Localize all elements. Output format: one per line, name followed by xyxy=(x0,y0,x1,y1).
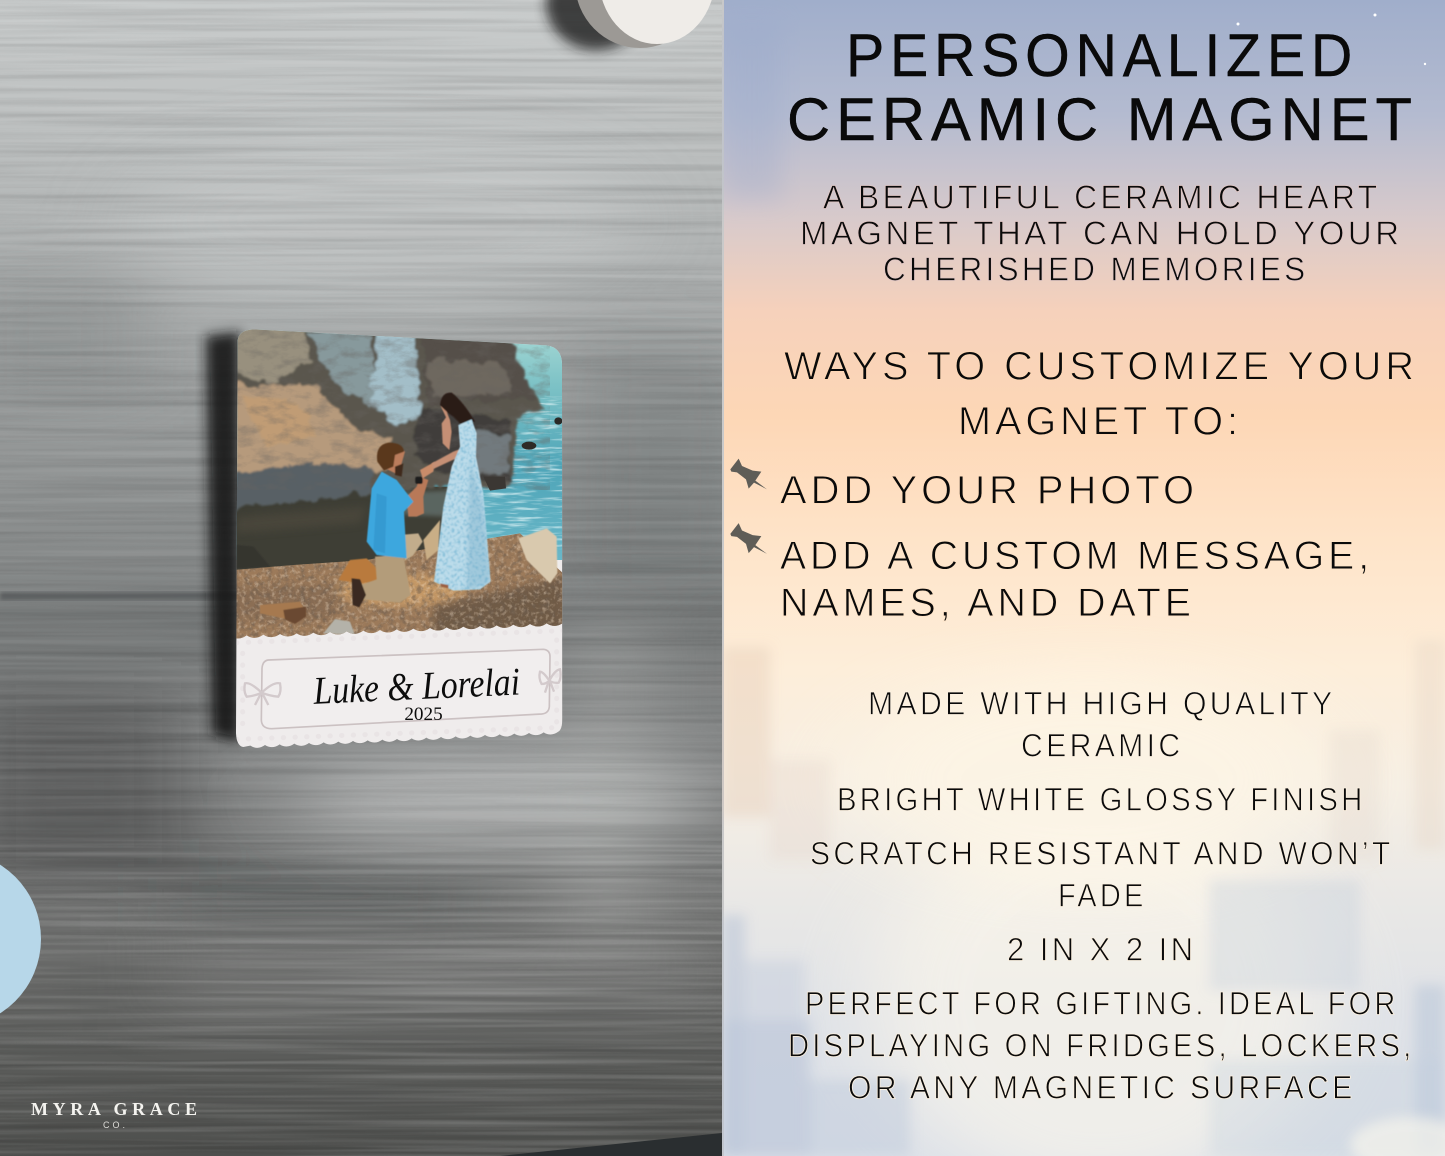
feature: high quality ceramic: MADE WITH HIGH QUALITY xyxy=(868,686,1336,722)
feature: scratch resistant: FADE xyxy=(1058,878,1146,914)
lace scallop trim xyxy=(237,631,563,739)
woman in blue dress xyxy=(432,393,493,593)
icon: left bow xyxy=(244,683,281,705)
feature: gifting: PERFECT FOR GIFTING. IDEAL FOR xyxy=(805,986,1398,1022)
heading: ways to customize xyxy=(784,344,1418,444)
feature list xyxy=(788,686,1414,1106)
title xyxy=(787,22,1418,153)
far leg xyxy=(404,532,423,560)
man kneeling xyxy=(352,443,435,607)
subtitle: A BEAUTIFUL CERAMIC HEART xyxy=(823,178,1380,216)
list item: add a custom message xyxy=(780,534,1373,625)
heading: ways to customize: MAGNET TO: xyxy=(958,400,1242,444)
sea stones xyxy=(554,417,562,425)
dress xyxy=(434,419,491,591)
outstretched arm xyxy=(431,449,460,470)
name plate xyxy=(244,649,561,729)
feature: scratch resistant xyxy=(810,836,1394,914)
subtitle xyxy=(800,178,1402,288)
hands xyxy=(420,462,435,478)
subtitle: CHERISHED MEMORIES xyxy=(883,250,1308,288)
dark cove water xyxy=(233,487,460,570)
title: CERAMIC MAGNET xyxy=(787,86,1418,153)
feature: gifting xyxy=(788,986,1414,1106)
thigh and calf xyxy=(357,555,411,603)
panel: watercolor sky and city background xyxy=(722,0,1445,1156)
panel: brushed steel fridge background xyxy=(0,0,760,1156)
photo of proposal on the shore xyxy=(236,330,562,638)
feature: glossy finish: BRIGHT WHITE GLOSSY FINISH xyxy=(837,782,1366,818)
icon: round blue fridge magnet at left xyxy=(0,851,41,1027)
icon: push pin 2 xyxy=(730,523,767,554)
feet xyxy=(440,583,448,588)
icon: right bow xyxy=(539,669,561,693)
title: PERSONALIZED xyxy=(846,22,1358,89)
neck and head xyxy=(387,450,406,474)
list item: add a custom message: ADD A CUSTOM MESSAGE, xyxy=(780,534,1373,578)
icon: round white fridge magnet at top xyxy=(546,0,715,50)
rock cliff xyxy=(220,320,550,512)
icon: push pin 1 xyxy=(730,459,767,489)
brand logo: CO. xyxy=(103,1120,125,1130)
boot xyxy=(352,578,366,607)
year: 2025 xyxy=(404,704,443,725)
feature: size: 2 IN X 2 IN xyxy=(1007,932,1196,968)
hair xyxy=(440,393,475,425)
feature: gifting: OR ANY MAGNETIC SURFACE xyxy=(848,1070,1356,1106)
magnet shadow xyxy=(206,332,240,742)
feature: high quality ceramic: CERAMIC xyxy=(1021,728,1184,764)
feature: high quality ceramic xyxy=(868,686,1336,764)
stones on ground xyxy=(260,520,557,635)
list item: add your photo: ADD YOUR PHOTO xyxy=(780,468,1198,512)
brand logo xyxy=(31,1099,197,1130)
pebble ground xyxy=(233,533,567,647)
subtitle: MAGNET THAT CAN HOLD YOUR xyxy=(800,214,1402,252)
names: Luke & Lorelai xyxy=(312,660,521,713)
shirt xyxy=(367,472,413,558)
magnet base card xyxy=(220,320,567,753)
brand logo: MYRA GRACE xyxy=(31,1099,197,1119)
watch xyxy=(415,477,423,484)
heading: ways to customize: WAYS TO CUSTOMIZE YOUR xyxy=(784,344,1418,388)
list item: add a custom message: NAMES, AND DATE xyxy=(780,581,1195,625)
feature: scratch resistant: SCRATCH RESISTANT AND WON’T xyxy=(810,836,1394,872)
orange rock behind man xyxy=(338,558,377,584)
ceramic photo magnet xyxy=(220,320,567,753)
arm xyxy=(407,477,428,517)
sea water xyxy=(233,327,567,560)
face and hand xyxy=(441,406,452,450)
